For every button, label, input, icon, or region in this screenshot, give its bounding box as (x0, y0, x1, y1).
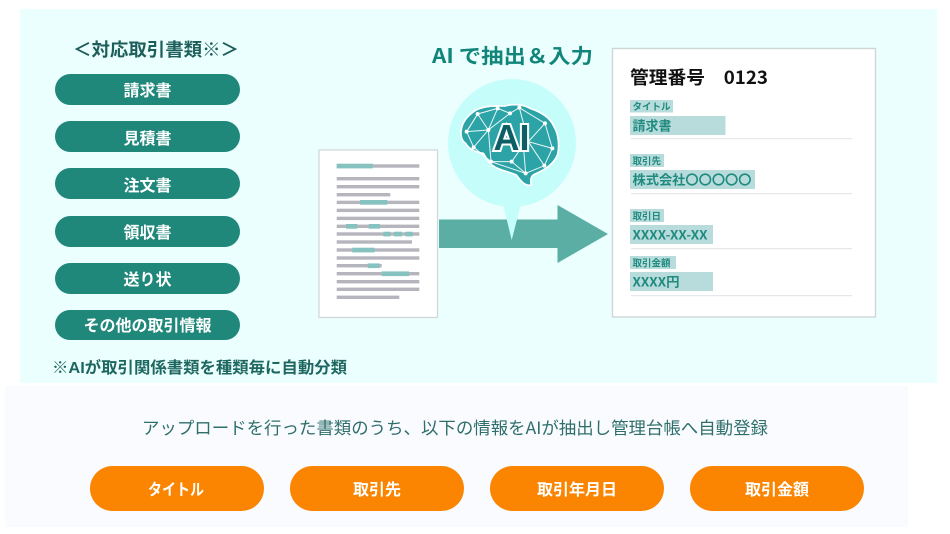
document type pills: 請求書 (123, 81, 172, 100)
orange pill: title (90, 466, 264, 511)
field: counterparty: 株式会社〇〇〇〇〇 (632, 170, 752, 188)
field: title (630, 99, 852, 139)
document type pills: 見積書 (123, 129, 172, 148)
field: amount: 取引金額 (632, 256, 671, 270)
field: counterparty: 取引先 (632, 154, 662, 168)
field: amount (630, 256, 852, 296)
orange pill: transaction amount: 取引金額 (745, 480, 809, 499)
heading: AI extraction: AI で抽出＆入力 (431, 40, 593, 69)
arrow (439, 205, 608, 263)
panel: management record card (612, 48, 876, 317)
document type pills: 送り状 (123, 271, 172, 289)
orange pill: title: タイトル (148, 481, 204, 499)
field: title: タイトル (632, 99, 671, 113)
orange pill: transaction date (490, 466, 664, 511)
label: AI: AI (494, 117, 530, 158)
field: date: 取引日 (632, 208, 661, 222)
panel: extracted fields (5, 386, 908, 527)
field: title: 請求書 (632, 116, 672, 134)
icon: AI speech bubble with brain (448, 79, 576, 240)
orange pill: counterparty: 取引先 (353, 480, 401, 499)
document type pills: 注文書 (123, 176, 172, 195)
document type pills (55, 74, 240, 340)
orange pill: transaction date: 取引年月日 (537, 480, 617, 499)
field: date: XXXX-XX-XX (632, 224, 708, 244)
orange pill: transaction amount (690, 466, 864, 511)
field: date (630, 208, 852, 249)
field: counterparty (630, 154, 852, 194)
document type pills: その他の取引情報 (84, 316, 212, 335)
document type pills: 領収書 (123, 223, 172, 242)
panel: top extraction flow (20, 9, 937, 383)
description text: アップロードを行った書類のうち、以下の情報をAIが抽出し管理台帳へ自動登録 (142, 414, 768, 439)
heading: supported documents: ＜対応取引書類※＞ (73, 39, 239, 60)
card title: 管理番号 0123 (630, 64, 768, 90)
icon: brain (461, 105, 559, 185)
icon: source document (319, 150, 438, 318)
footnote: ※AIが取引関係書類を種類毎に自動分類 (52, 358, 347, 377)
field: amount: XXXX円 (632, 272, 680, 290)
orange pill: counterparty (290, 466, 464, 511)
